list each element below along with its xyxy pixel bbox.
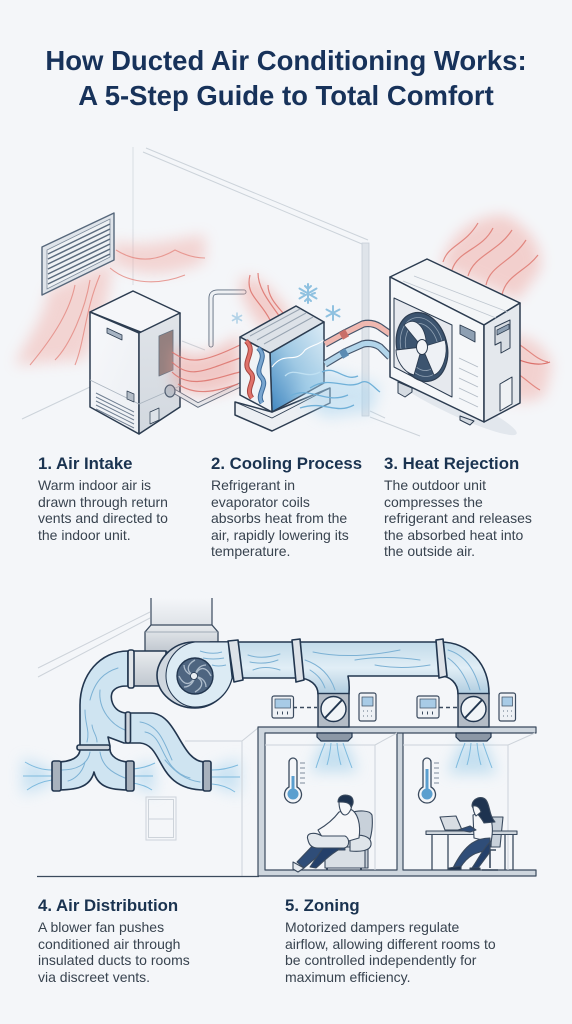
step 2 text: 2. Cooling Process <box>211 454 362 473</box>
ceiling diffusers and cold air <box>310 733 497 774</box>
step 2 text: temperature. <box>211 543 290 559</box>
step 2 text: evaporator coils <box>211 494 310 510</box>
roof lines and house outline <box>38 612 258 876</box>
title: A 5-Step Guide to Total Comfort <box>78 80 494 111</box>
warm airflow: vent to indoor unit <box>15 235 205 365</box>
warm airflow: indoor unit to coil <box>172 273 292 394</box>
snowflakes <box>232 284 340 323</box>
step 3 text: 3. Heat Rejection <box>384 454 519 473</box>
step 5 text: Motorized dampers regulate <box>285 919 459 935</box>
step 5 text <box>285 896 496 985</box>
step 4 text: A blower fan pushes <box>38 919 164 935</box>
step 2 text: Refrigerant in <box>211 477 295 493</box>
floor line <box>37 876 259 878</box>
main supply duct <box>210 639 489 694</box>
room walls and floor lines <box>22 147 420 436</box>
step 5 text: airflow, allowing different rooms to <box>285 936 496 952</box>
step 1 text: Warm indoor air is <box>38 477 151 493</box>
dampers <box>318 694 489 727</box>
cool airflow from coil <box>285 368 380 418</box>
lower left duct branches <box>52 650 211 791</box>
step 4 text: 4. Air Distribution <box>38 896 178 915</box>
step 4 text <box>38 896 190 984</box>
title: How Ducted Air Conditioning Works: <box>45 45 527 76</box>
step 5 text: 5. Zoning <box>285 896 360 915</box>
step 3 text: compresses the <box>384 494 483 510</box>
step 1 text <box>38 454 168 542</box>
step 1 text: vents and directed to <box>38 510 168 526</box>
step 3 text: refrigerant and releases <box>384 510 532 526</box>
duct outlet airflow <box>22 758 240 795</box>
person at desk <box>426 798 517 870</box>
thermostats and remote controls <box>272 693 516 721</box>
hot airflow from outdoor unit <box>441 215 552 401</box>
step 4 text: conditioned air through <box>38 936 180 952</box>
step 1 text: the indoor unit. <box>38 526 131 542</box>
title <box>45 45 527 111</box>
step 2 text <box>211 454 362 559</box>
step 5 text: maximum efficiency. <box>285 968 411 984</box>
plenum above blower <box>145 598 218 652</box>
step 4 text: insulated ducts to rooms <box>38 952 190 968</box>
step 1 text: 1. Air Intake <box>38 454 133 473</box>
step 3 text: The outdoor unit <box>384 477 486 493</box>
step 2 text: absorbs heat from the <box>211 510 347 526</box>
evaporator coil <box>235 306 330 431</box>
grille: return air vent <box>42 213 114 295</box>
pipes between indoor unit and coil <box>165 292 244 405</box>
step 4 text: via discreet vents. <box>38 968 150 984</box>
step 1 text: drawn through return <box>38 494 168 510</box>
step 3 text: the absorbed heat into <box>384 526 523 542</box>
room structure <box>258 727 536 876</box>
step 5 text: be controlled independently for <box>285 952 476 968</box>
step 3 text: the outside air. <box>384 543 475 559</box>
person in armchair <box>293 795 372 872</box>
outdoor unit <box>389 259 521 443</box>
refrigerant pipes to outdoor unit <box>325 323 390 364</box>
wall post <box>362 243 369 416</box>
step 3 text <box>384 454 532 559</box>
indoor unit <box>90 291 180 434</box>
step 2 text: air, rapidly lowering its <box>211 526 349 542</box>
thermometers <box>284 758 439 803</box>
blower fan <box>157 642 232 708</box>
